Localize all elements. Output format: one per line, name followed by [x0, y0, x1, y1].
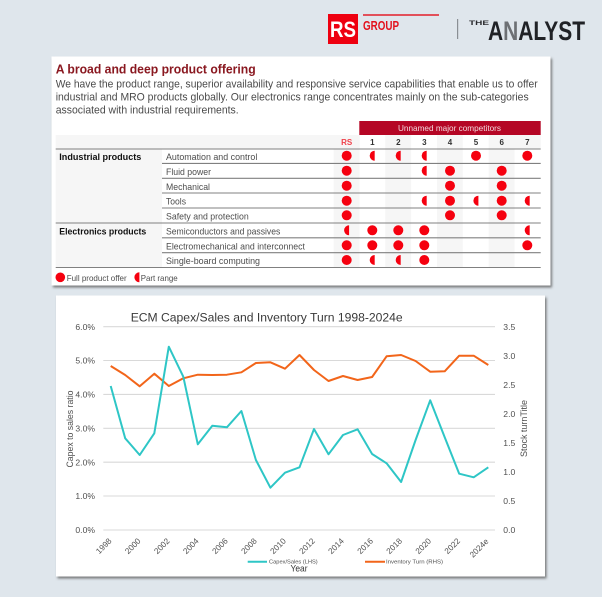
sub-category labels: Tools [166, 197, 186, 207]
right axis labels: 0.0 [503, 525, 515, 535]
right axis title: Stock turnTitle [519, 400, 529, 457]
right axis labels: 2.0 [503, 409, 515, 419]
right axis labels: 1.0 [503, 467, 515, 477]
sub-category labels [166, 152, 305, 266]
x axis labels: 2000 [123, 536, 143, 556]
left axis labels: 5.0% [75, 356, 95, 366]
full and part range markers [342, 151, 532, 265]
sub-category labels: Mechanical [166, 182, 210, 192]
header band: competitors [359, 121, 541, 135]
logo: RS Group: GROUP [363, 18, 399, 33]
heading: product offering: A broad and deep product offering [56, 61, 256, 76]
column headers: 7 [525, 138, 530, 147]
sub-category labels: Semiconductors and passives [166, 226, 281, 236]
x axis labels: 2016 [356, 536, 375, 556]
legend: inventory [365, 560, 443, 566]
logo: The Analyst [457, 16, 585, 46]
column headers: 3 [422, 138, 427, 147]
logo: The Analyst: ANALYST [488, 16, 585, 46]
right axis labels [503, 322, 515, 535]
legend: product offer: Part range [141, 274, 178, 283]
logo: RS Group: RS [330, 17, 356, 42]
text block: intro: We have the product range, superior availability and responsive service capabilities that enable us to offer [56, 79, 538, 91]
text block: intro: associated with industrial requirements. [56, 105, 239, 117]
line: capex to sales [111, 347, 488, 488]
column headers: RS [341, 138, 353, 147]
legend: capex [248, 560, 318, 566]
column headers [341, 138, 530, 147]
category labels: Industrial products [59, 152, 141, 162]
left axis labels: 4.0% [75, 390, 95, 400]
legend: product offer: Full product offer [67, 274, 127, 283]
x axis title: Year [290, 564, 308, 574]
x axis labels: 2006 [211, 536, 230, 556]
logo: The Analyst: THE [469, 20, 490, 27]
logo: RS Group [328, 14, 439, 44]
chart title: ECM Capex/Sales and Inventory Turn 1998-2024e [131, 311, 403, 325]
legend: inventory: Inventory Turn (RHS) [386, 560, 443, 566]
panel: product offering [52, 56, 550, 286]
x axis labels: 2012 [298, 536, 317, 556]
text block: intro [56, 79, 538, 117]
left axis labels: 1.0% [75, 491, 95, 501]
sub-category labels: Fluid power [166, 167, 211, 177]
right axis labels: 1.5 [503, 438, 515, 448]
sub-category labels: Automation and control [166, 152, 257, 162]
column headers: 5 [474, 138, 479, 147]
header band: competitors: Unnamed major competitors [398, 124, 501, 133]
text block: intro: industrial and MRO products globally. Our electronics range concentrates mainly on the sub-categories [56, 92, 529, 104]
sub-category labels: Safety and protection [166, 212, 249, 222]
column headers: 2 [396, 138, 401, 147]
left axis labels: 6.0% [75, 322, 95, 332]
x axis labels: 2022 [443, 536, 462, 556]
category labels: Electronics products [59, 226, 146, 236]
sub-category labels: Single-board computing [166, 256, 260, 266]
column headers: 6 [499, 138, 504, 147]
left axis labels: 2.0% [75, 457, 95, 467]
left axis labels [75, 322, 95, 535]
x axis labels: 2010 [269, 536, 288, 556]
left axis labels: 0.0% [75, 525, 95, 535]
x axis labels: 1998 [94, 536, 114, 556]
left axis title: Capex to sales ratio [65, 390, 75, 468]
legend: product offer [56, 272, 178, 283]
x axis labels: 2014 [327, 536, 346, 556]
column headers: 4 [448, 138, 453, 147]
legend: capex: Capex/Sales (LHS) [269, 560, 318, 566]
right axis labels: 3.5 [503, 322, 515, 332]
x axis labels [94, 536, 491, 559]
x axis labels: 2024e [468, 537, 491, 559]
category labels [59, 152, 146, 236]
panel: ECM chart [56, 296, 545, 576]
x axis labels: 2002 [152, 536, 172, 556]
table: competitor matrix [56, 121, 541, 268]
right axis labels: 0.5 [503, 496, 515, 506]
column headers: 1 [370, 138, 375, 147]
left axis labels: 3.0% [75, 423, 95, 433]
right axis labels: 2.5 [503, 380, 515, 390]
x axis labels: 2008 [240, 536, 259, 556]
sub-category labels: Electromechanical and interconnect [166, 241, 305, 251]
right axis labels: 3.0 [503, 351, 515, 361]
line: inventory turn [111, 355, 488, 386]
x axis labels: 2004 [181, 536, 201, 556]
x axis labels: 2018 [385, 536, 404, 556]
x axis labels: 2020 [414, 536, 433, 556]
